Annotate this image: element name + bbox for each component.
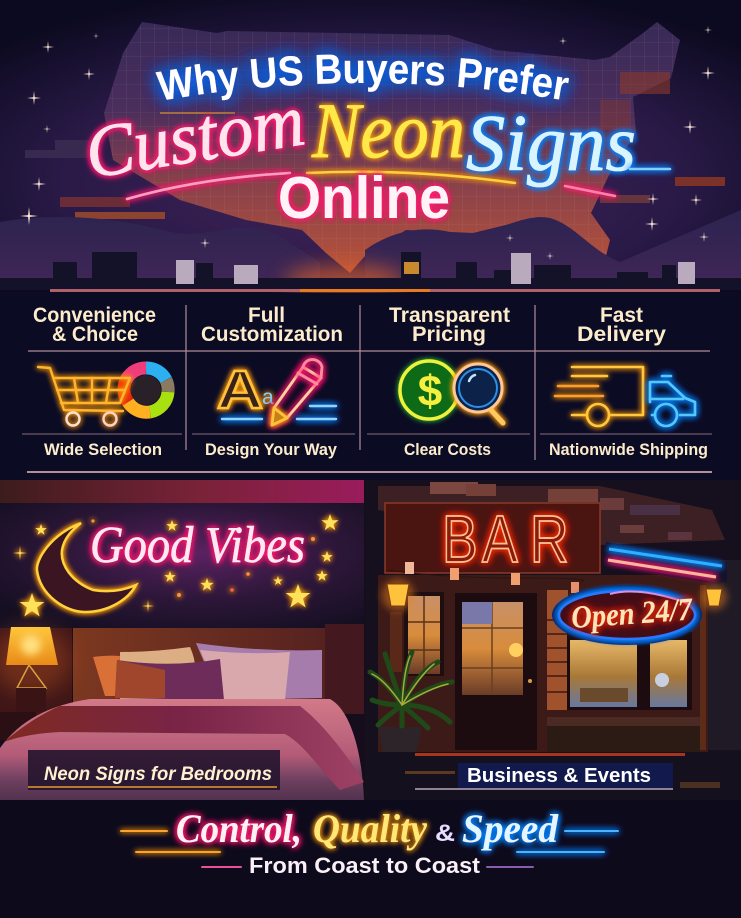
icon: letters A and a: [217, 360, 274, 420]
heading: Full: [248, 304, 285, 327]
caption: Neon Signs for Bedrooms: Neon Signs for Bedrooms: [44, 764, 272, 785]
stars in the sky: [20, 26, 715, 260]
word: Speed: Speed: [462, 806, 559, 851]
open 24/7 oval sign: [554, 587, 700, 643]
brick facade: [378, 482, 741, 755]
title word: Online: Online: [278, 165, 450, 231]
open 24/7 oval sign: Open 24/7: [570, 591, 695, 635]
icon: truck cab: [650, 376, 695, 426]
caption: Design Your Way: [205, 440, 338, 459]
heading: Transparent: [389, 304, 510, 327]
pillows: [93, 643, 322, 700]
ground: [365, 752, 741, 800]
brick column: [547, 590, 568, 710]
icon: blue writing lines: [222, 406, 336, 419]
caption: Wide Selection: [44, 440, 162, 459]
icon: truck cargo box and speed lines: [555, 367, 643, 426]
left window: [390, 592, 444, 676]
wall stars: [13, 514, 339, 617]
neon text: Good Vibes: Good Vibes: [90, 517, 305, 574]
heading: Fast: [600, 304, 643, 327]
bed and blanket: [0, 699, 364, 800]
door: [455, 593, 537, 750]
title word: Signs: Signs: [466, 100, 636, 188]
icon: pencil: [272, 359, 322, 425]
heading: Pricing: [412, 323, 486, 346]
caption: Neon Signs for Bedrooms: [28, 750, 280, 790]
word: Quality: Quality: [313, 806, 427, 851]
panel: four benefits: [0, 293, 741, 480]
icon: dollar coin: $: [418, 367, 442, 416]
orange horizon glow: [285, 266, 405, 294]
map of the United States: [25, 20, 725, 280]
title word: Neon: Neon: [311, 87, 465, 174]
icon: letters A and a: A: [217, 360, 263, 420]
neon tubes panel: [604, 542, 727, 584]
panel: bar storefront scene: [365, 480, 741, 800]
title line: Why US Buyers Prefer: Why US Buyers Prefer: [143, 39, 580, 114]
title underlines: [127, 169, 670, 199]
neon moon: [37, 523, 136, 612]
panel: footer tagline: [0, 800, 741, 918]
dividers: [22, 305, 712, 472]
bar sign board: [385, 503, 600, 573]
headboard: [0, 624, 364, 718]
column: convenience and choice: [33, 304, 168, 459]
potted plant: [370, 652, 452, 757]
icon: palette: [124, 368, 168, 412]
subtitle: From Coast to Coast: From Coast to Coast: [249, 853, 481, 878]
caption: Business & Events: [415, 763, 673, 789]
right windows: [567, 632, 692, 710]
table lamp: [0, 626, 72, 740]
column: full customization: [201, 304, 343, 459]
panel: bedroom scene: [0, 480, 365, 800]
icon: dollar coin: [400, 361, 458, 419]
ceiling beam: [0, 480, 364, 503]
heading: Convenience: [33, 304, 156, 327]
caption: Nationwide Shipping: [549, 440, 708, 459]
word: Control,: Control,: [176, 806, 302, 851]
heading: Delivery: [577, 323, 666, 346]
lanterns: [382, 579, 727, 611]
dark clouds over the map: [0, 210, 741, 283]
column: transparent pricing: [389, 304, 510, 459]
column: fast delivery: [549, 304, 708, 459]
neon text: BAR: BAR: [442, 501, 569, 576]
ampersand: &: [435, 820, 455, 847]
city skyline: [0, 252, 741, 292]
nebula wall: [0, 503, 364, 628]
icon: shopping cart: [38, 367, 130, 426]
window ledge and lower wall: [547, 585, 706, 752]
icon: magnifying glass: [454, 364, 503, 423]
string lights: [388, 562, 584, 593]
caption: Clear Costs: [404, 440, 491, 459]
caption: Business & Events: Business & Events: [467, 765, 651, 787]
panel: hero header: [0, 0, 741, 293]
heading: & Choice: [52, 323, 138, 346]
flanking neon lines: [121, 831, 618, 867]
icon: letters A and a: a: [262, 386, 274, 409]
title word: Custom: Custom: [80, 79, 310, 195]
heading: Customization: [201, 323, 343, 346]
